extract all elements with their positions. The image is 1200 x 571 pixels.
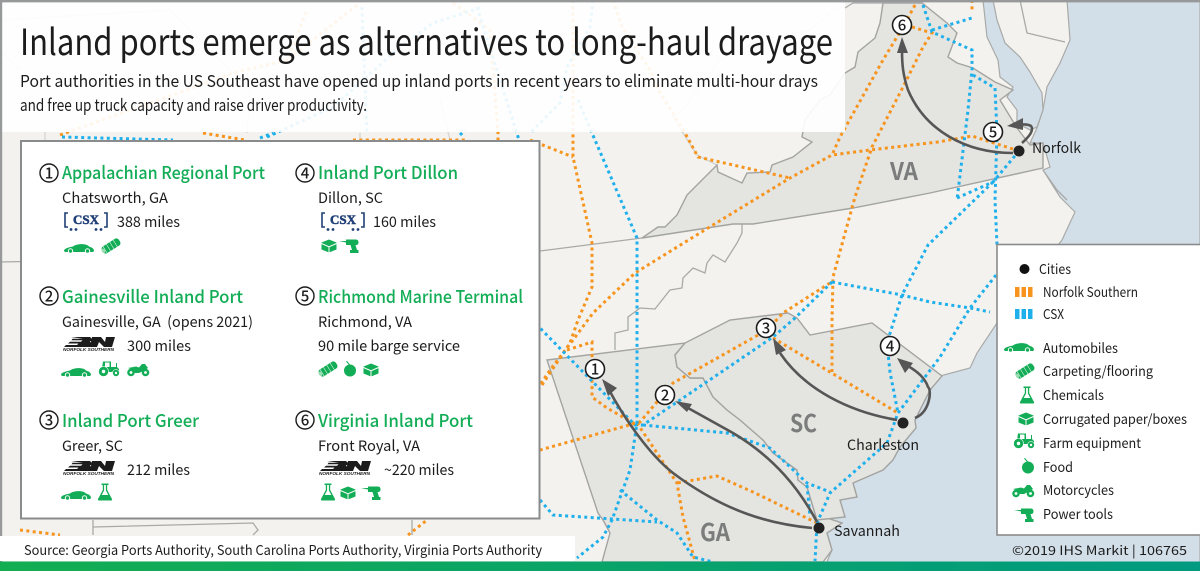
map: South Carolina highlighted state [675, 313, 942, 520]
title: Inland ports emerge as alternatives to long-haul drayage [20, 14, 833, 66]
city marker: Savannah [814, 522, 824, 534]
legend: motorcycles: Motorcycles [1043, 479, 1114, 499]
port 5: Richmond Marine Terminal [296, 284, 523, 378]
map marker 2 [656, 384, 674, 406]
city marker: Norfolk [1014, 146, 1024, 156]
port 5: Richmond Marine Terminal: Richmond Marine Terminal [318, 284, 523, 309]
legend: chemicals [1020, 384, 1104, 404]
subtitle: Port authorities in the US Southeast have opened up inland ports in recent years to eliminate multi-hour drays [20, 68, 818, 92]
legend: chemicals: Chemicals [1043, 384, 1104, 404]
source note: Source: Georgia Ports Authority, South Carolina Ports Authority, Virginia Ports Authority [24, 539, 542, 559]
legend: farm equipment: Farm equipment [1043, 432, 1141, 452]
map: Chesapeake Bay [983, 0, 1043, 130]
port 5: Richmond Marine Terminal: Richmond, VA [318, 311, 412, 332]
port 3: Inland Port Greer: 212 miles [127, 459, 190, 480]
port 2: Gainesville Inland Port: 300 miles [127, 335, 191, 356]
map marker 1: 1 [591, 358, 599, 380]
legend: CSX [1015, 303, 1064, 323]
state label: GA: GA [700, 513, 731, 548]
legend: motorcycles [1012, 479, 1114, 499]
map marker 4 [880, 336, 900, 356]
port 1: Appalachian Regional Port: Appalachian Regional Port [62, 160, 265, 185]
port 1: Appalachian Regional Port: 388 miles [117, 211, 180, 232]
map: Virginia highlighted state [642, 3, 1043, 238]
city marker: Charleston [898, 418, 908, 428]
legend: power tools [1014, 503, 1113, 523]
port 6: Virginia Inland Port: ~220 miles [384, 459, 454, 480]
port 6: Virginia Inland Port: 6 [301, 410, 309, 430]
state label: SC: SC [790, 404, 817, 439]
map marker 3 [756, 318, 776, 338]
port 4: Inland Port Dillon: 4 [301, 162, 310, 184]
city label: Savannah: Savannah [834, 520, 900, 541]
title background panel [0, 0, 845, 132]
port 1: Appalachian Regional Port: 1 [45, 162, 53, 184]
map marker 4: 4 [886, 336, 895, 356]
map: Georgia highlighted state [547, 343, 842, 562]
legend: power tools: Power tools [1043, 503, 1113, 523]
city label: Charleston: Charleston [847, 434, 919, 455]
port 2: Gainesville Inland Port: 2 [45, 286, 53, 306]
port 1: Appalachian Regional Port: Chatsworth, GA [62, 187, 168, 208]
city label: Norfolk: Norfolk [1032, 137, 1081, 158]
port 4: Inland Port Dillon: 160 miles [373, 211, 436, 232]
legend: food [1022, 456, 1073, 476]
route arrows [602, 37, 1032, 528]
port 2: Gainesville Inland Port: Gainesville, GA (opens 2021) [62, 311, 253, 332]
copyright: ©2019 IHS Markit | 106765 [1012, 540, 1187, 559]
port 2: Gainesville Inland Port [40, 284, 253, 377]
legend: Norfolk Southern: Norfolk Southern [1043, 281, 1138, 301]
port 1: Appalachian Regional Port [40, 160, 265, 255]
legend: cities [1020, 258, 1071, 278]
port 4: Inland Port Dillon: Inland Port Dillon [318, 160, 458, 185]
port 4: Inland Port Dillon: Dillon, SC [318, 187, 383, 208]
map marker 5: 5 [989, 122, 997, 142]
panel: inland port list [21, 141, 540, 518]
subtitle [20, 68, 818, 116]
map: Atlantic Ocean [823, 0, 1200, 571]
map marker 6: 6 [898, 14, 906, 36]
port 6: Virginia Inland Port: Virginia Inland Port [317, 408, 473, 433]
port 3: Inland Port Greer: Inland Port Greer [62, 408, 200, 433]
port 5: Richmond Marine Terminal: 5 [301, 286, 309, 306]
subtitle: and free up truck capacity and raise driver productivity. [20, 92, 367, 116]
legend: automobiles: Automobiles [1043, 337, 1118, 357]
legend: corrugated paper/boxes: Corrugated paper/boxes [1043, 408, 1187, 428]
state label: VA: VA [889, 152, 919, 187]
legend: food: Food [1043, 456, 1073, 476]
footer gradient bar [0, 562, 1200, 571]
legend [997, 244, 1200, 535]
map marker 5 [984, 122, 1002, 142]
port 2: Gainesville Inland Port: Gainesville Inland Port [62, 284, 243, 309]
map marker 6 [892, 14, 912, 36]
port 4: Inland Port Dillon [296, 160, 458, 253]
port 3: Inland Port Greer [40, 408, 200, 500]
port 5: Richmond Marine Terminal: 90 mile barge service [318, 335, 460, 356]
map marker 3: 3 [762, 318, 770, 338]
legend: carpeting/flooring: Carpeting/flooring [1043, 360, 1153, 380]
port 6: Virginia Inland Port: Front Royal, VA [318, 435, 420, 456]
map marker 1 [586, 358, 604, 380]
port 6: Virginia Inland Port [296, 408, 473, 500]
port 3: Inland Port Greer: Greer, SC [62, 435, 123, 456]
port 3: Inland Port Greer: 3 [45, 410, 53, 430]
legend: cities: Cities [1039, 258, 1071, 278]
legend: Norfolk Southern [1015, 281, 1138, 301]
legend: CSX: CSX [1043, 303, 1064, 323]
legend: automobiles [1004, 337, 1118, 357]
rail lines: CSX [62, 0, 1019, 562]
map marker 2: 2 [661, 384, 669, 406]
